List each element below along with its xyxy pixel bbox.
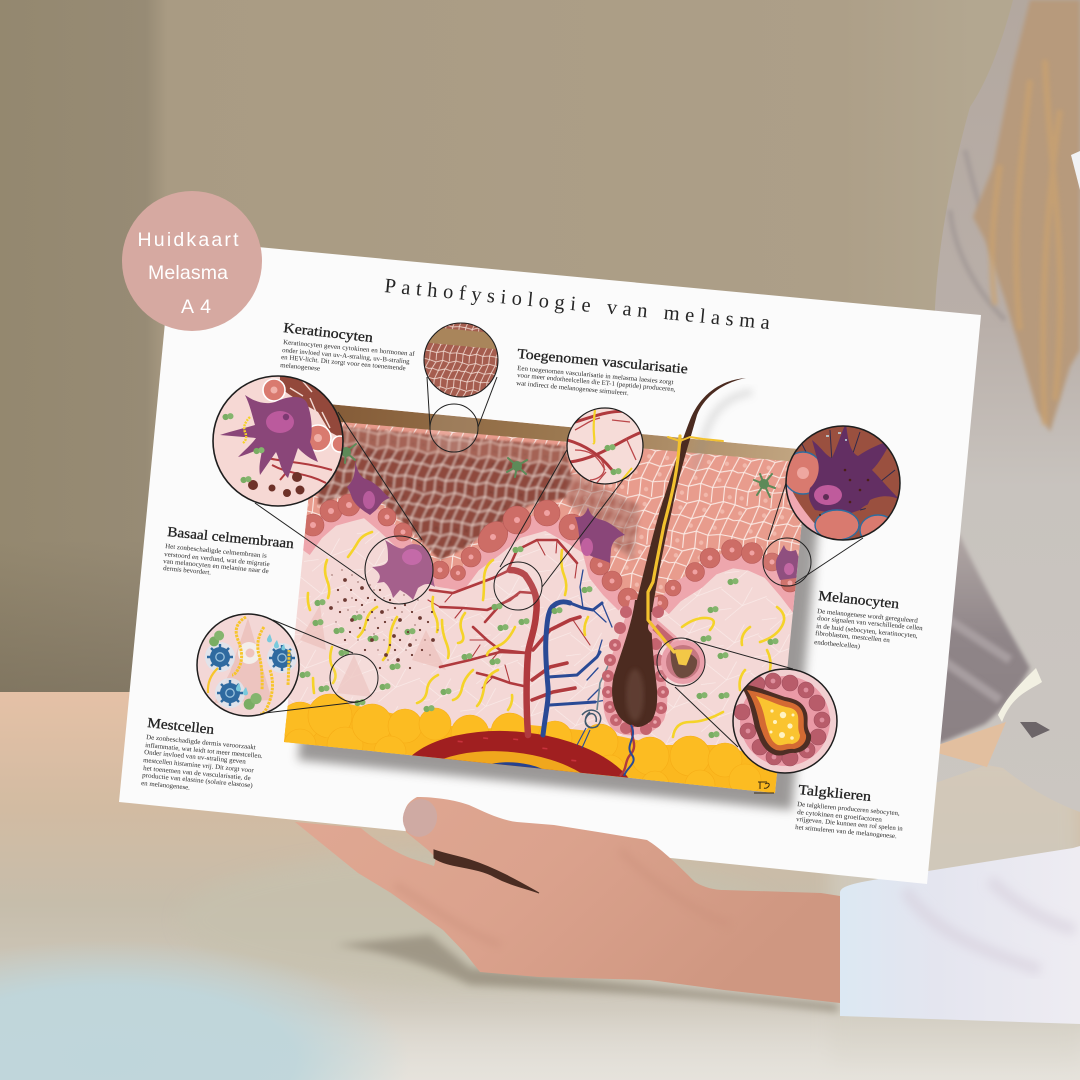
text block: Basaal celmembraan: van melanocyten en melanine naar de xyxy=(163,558,269,575)
fibroblasts xyxy=(300,605,446,697)
person: blond hair xyxy=(973,0,1080,432)
thumb nail xyxy=(399,795,441,841)
text block: Mestcellen: het toenemen van de vascularisatie, de xyxy=(143,765,251,782)
text block: Basaal celmembraan xyxy=(163,525,294,577)
skin illustration xyxy=(284,378,824,816)
text block: Toegenomen vascularisatie: Toegenomen vascularisatie xyxy=(517,347,688,377)
dermis xyxy=(284,404,802,793)
melanosomes xyxy=(248,472,304,497)
text block: Melanocyten: Melanocyten xyxy=(818,589,900,612)
small zoom circle mast cell xyxy=(330,654,378,702)
small zoom circle melanocyte xyxy=(763,538,811,586)
melanocyte right xyxy=(776,545,801,580)
hair bulb xyxy=(612,600,657,727)
text block: Melanocyten: fibroblasten, mestcellen en xyxy=(815,630,891,644)
small zoom circle sebaceous gland xyxy=(657,638,705,686)
skin cross-section xyxy=(284,404,802,793)
stratum corneum xyxy=(332,404,796,462)
text block: Basaal celmembraan: dermis bevordert. xyxy=(163,565,212,577)
keratinocyte left xyxy=(786,451,819,495)
artery xyxy=(412,730,628,778)
round keratinocytes xyxy=(263,379,285,401)
callout: keratinocytes and melanocyte xyxy=(210,372,348,510)
text block: Mestcellen: productie van elastine (solaire elastose) xyxy=(142,772,253,789)
fibroblast green pairs xyxy=(300,546,778,738)
small zoom circle vessels xyxy=(494,562,542,610)
text block: Toegenomen vascularisatie: voor meer endotheelcellen die ET-1 (peptide) produceren, xyxy=(517,372,676,393)
text block: Talgklieren: Talgklieren xyxy=(798,783,872,805)
melanocyte large xyxy=(220,395,318,478)
text block: Mestcellen: De zonbeschadigde dermis veroorzaakt xyxy=(146,734,256,751)
text block: Mestcellen: en melanogenese. xyxy=(141,780,191,792)
hair shaft xyxy=(634,378,752,612)
text block: Talgklieren xyxy=(795,783,904,840)
green pairs xyxy=(206,629,227,648)
thumb crease xyxy=(434,850,539,893)
mast cells xyxy=(205,642,235,672)
dendritic cells green xyxy=(335,444,775,497)
text block: Keratinocyten: en HEV-licht. Dit zorgt voor een toenemende xyxy=(281,354,406,372)
histamine drops xyxy=(236,634,285,695)
callout: melanocyte with dendrites xyxy=(783,424,902,545)
papilla vessels xyxy=(620,725,634,776)
small zoom circle epidermis xyxy=(430,404,478,452)
person: blouse xyxy=(915,0,1080,812)
melanocyte body xyxy=(809,424,900,515)
callout: stratum corneum and epidermis xyxy=(423,322,499,398)
text block: Mestcellen: Onder invloed van uv-straling geven xyxy=(144,749,247,766)
text block: Mestcellen xyxy=(141,716,263,792)
sebaceous gland xyxy=(655,627,705,684)
blood vessels red xyxy=(428,540,590,735)
text block: Toegenomen vascularisatie xyxy=(516,347,688,397)
text block: Melanocyten: De melanogenese wordt gereguleerd xyxy=(817,608,919,625)
gland lobule xyxy=(740,684,811,755)
photo background: table xyxy=(0,692,1080,1080)
hair follicle xyxy=(602,597,669,776)
vessels xyxy=(267,458,332,483)
text block: Mestcellen: inflammatie, wat leidt tot meer mestcellen. xyxy=(145,742,263,760)
elastin bead strings xyxy=(232,617,289,714)
elastin fibres yellow xyxy=(308,532,784,737)
basement membrane band xyxy=(300,505,806,610)
text block: Toegenomen vascularisatie: Een toegenomen vascularisatie in melasma laesies zorgt xyxy=(517,365,674,386)
signature mark xyxy=(754,782,774,793)
poster sheet xyxy=(119,239,981,884)
melasma pigment patch xyxy=(318,425,572,560)
text block: Keratinocyten: onder invloed van uv-A-straling, uv-B-straling xyxy=(282,347,411,366)
adipose fat layer xyxy=(284,694,777,793)
text block: Mestcellen: mestcellen histamine vrij. Dit zorgt voor xyxy=(143,757,255,775)
nerve with coil xyxy=(576,666,608,748)
text block: Melanocyten xyxy=(814,589,924,650)
melanocyte left xyxy=(347,460,390,515)
zoom circle on dermis melanocyte xyxy=(365,536,435,604)
person: white sleeve xyxy=(840,846,1080,1024)
pink side band xyxy=(786,486,818,534)
basal keratinocytes xyxy=(302,494,799,611)
text block: Talgklieren: het stimuleren van de melanogenese. xyxy=(795,824,897,840)
text block: Keratinocyten xyxy=(280,321,416,373)
sebum on hair and skin surface xyxy=(648,436,723,665)
text block: Keratinocyten: melanogenese xyxy=(280,362,320,373)
melanin dots in dermis xyxy=(331,570,438,668)
text block: Basaal celmembraan: verstoord en verdund, wat de migratie xyxy=(164,551,270,568)
text block: Mestcellen: Mestcellen xyxy=(147,716,215,738)
keratinocytes bottom xyxy=(815,510,859,540)
callout: mast cells xyxy=(195,612,301,718)
text block: Toegenomen vascularisatie: wat indirect de melanogenese stimuleert. xyxy=(516,380,629,397)
text block: Keratinocyten: Keratinocyten xyxy=(283,321,374,346)
brown keratinocytes xyxy=(280,376,342,436)
callout: sebaceous gland xyxy=(730,666,840,776)
melanocyte centre xyxy=(575,507,625,563)
text block: Melanocyten: endotheelcellen) xyxy=(814,639,860,650)
vein xyxy=(492,762,542,769)
text block: Melanocyten: door signalen van verschillende cellen xyxy=(817,615,924,632)
knuckle shading xyxy=(395,850,730,945)
connector lines to callouts xyxy=(255,377,863,747)
text block: Melanocyten: in de huid (sebocyten, keratinocyten, xyxy=(816,623,918,640)
fibroblast xyxy=(214,618,272,703)
blood vessels blue xyxy=(543,570,612,735)
badge: Huidkaart Melasma A4: Melasma xyxy=(148,262,228,284)
badge: Huidkaart Melasma A4 xyxy=(122,191,262,331)
text block: Keratinocyten: Keratinocyten geven cytokinen en hormonen af xyxy=(283,339,416,358)
text block: Basaal celmembraan: Basaal celmembraan xyxy=(167,525,294,552)
callout: vascularisation xyxy=(565,406,645,486)
text block: Talgklieren: De talgklieren produceren sebocyten, xyxy=(797,801,900,817)
badge: Huidkaart Melasma A4: A4 xyxy=(181,296,211,318)
text block: Talgklieren: de cytokinen en groeifactoren xyxy=(797,809,883,824)
illustration drop shadow xyxy=(298,420,824,810)
text block: Talgklieren: vrijgeven. Die kunnen een rol spelen in xyxy=(796,816,904,833)
text block: Basaal celmembraan: Het zonbeschadigde celmembraan is xyxy=(165,543,267,560)
hand holding poster xyxy=(295,795,840,1003)
epidermis cells xyxy=(304,422,802,596)
badge: Huidkaart Melasma A4: Huidkaart xyxy=(138,229,239,251)
title: Pathofysiologie van melasma xyxy=(384,275,771,334)
photo background: wall xyxy=(0,0,1080,700)
